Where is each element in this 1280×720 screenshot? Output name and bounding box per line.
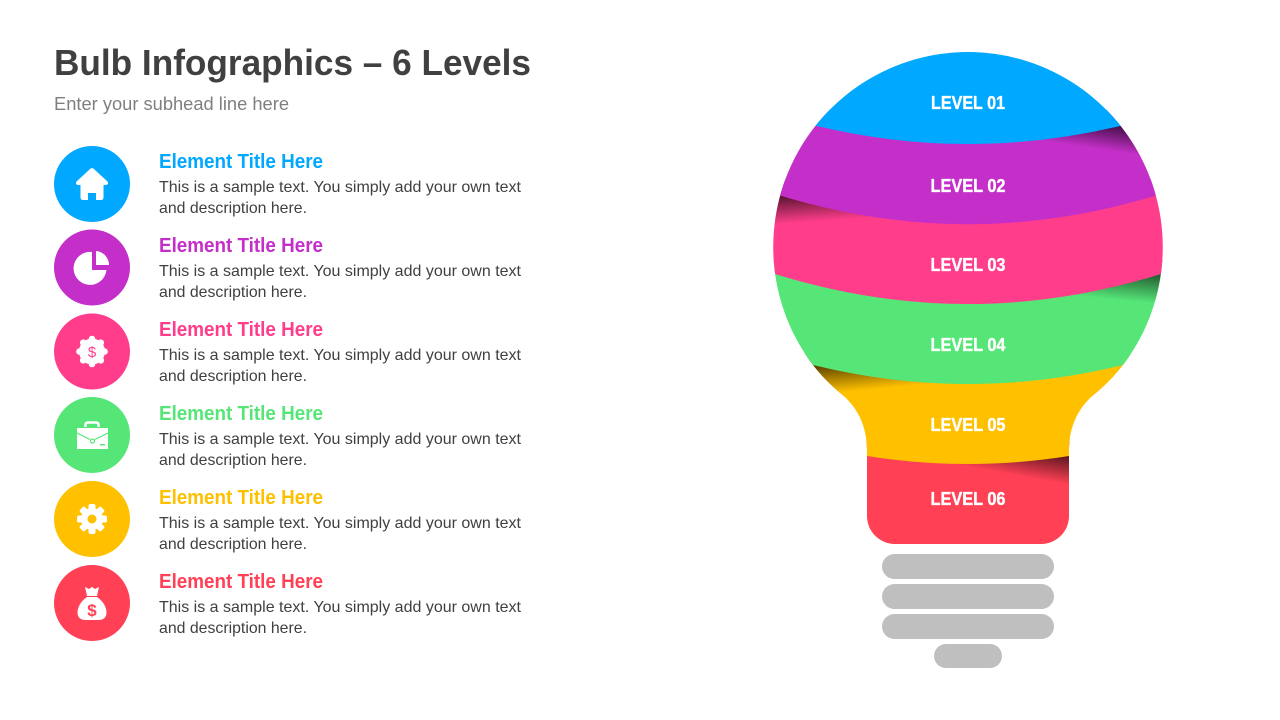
level 05 band (805, 350, 1130, 464)
level 05 band: LEVEL 05 (930, 415, 1006, 435)
level 06 band (866, 440, 1070, 544)
icon: gear (54, 481, 130, 557)
item 2 title: Element Title Here (159, 235, 323, 257)
level 06 band: LEVEL 06 (930, 489, 1006, 509)
subhead: Enter your subhead line here (54, 94, 289, 114)
light bulb glass (765, 40, 1170, 550)
item 1 text: This is a sample text. You simply add your own text (159, 179, 522, 196)
item 4 text: and description here. (159, 452, 307, 469)
level 02 band (770, 110, 1170, 224)
item 3 text: and description here. (159, 368, 307, 385)
item 2: pie chart (54, 230, 522, 306)
item 4 title: Element Title Here (159, 403, 323, 425)
item 1: home (54, 146, 522, 222)
level 02 band: LEVEL 02 (930, 176, 1006, 196)
item 1 text: and description here. (159, 200, 307, 217)
item 1 title: Element Title Here (159, 151, 323, 173)
item 6 text: This is a sample text. You simply add your own text (159, 599, 522, 616)
icon: dollar gear (54, 314, 130, 390)
icon: dollar gear: $ (88, 344, 97, 361)
item 3 title: Element Title Here (159, 319, 323, 341)
icon: money bag: $ (87, 601, 97, 620)
item 4: briefcase (54, 397, 522, 473)
item 5: gear (54, 481, 522, 557)
icon: money bag (54, 565, 130, 641)
icon: briefcase (54, 397, 130, 473)
icon: home (54, 146, 130, 222)
item 3: dollar gear (54, 314, 522, 390)
item 4 text: This is a sample text. You simply add your own text (159, 431, 522, 448)
item 5 title: Element Title Here (159, 487, 323, 509)
item 2 text: and description here. (159, 284, 307, 301)
icon: pie chart (54, 230, 130, 306)
level 01 band (815, 52, 1121, 144)
item 5 text: and description here. (159, 536, 307, 553)
level 01 band: LEVEL 01 (931, 93, 1005, 113)
bulb screw base (882, 554, 1054, 668)
item 2 text: This is a sample text. You simply add your own text (159, 263, 522, 280)
title: Bulb Infographics – 6 Levels (54, 42, 531, 83)
item 6: money bag (54, 565, 522, 641)
level 04 band (770, 260, 1170, 384)
level 03 band: LEVEL 03 (930, 255, 1006, 275)
level 03 band (765, 180, 1170, 304)
item 5 text: This is a sample text. You simply add your own text (159, 515, 522, 532)
item 6 title: Element Title Here (159, 571, 323, 593)
item 6 text: and description here. (159, 620, 307, 637)
item 3 text: This is a sample text. You simply add your own text (159, 347, 522, 364)
level 04 band: LEVEL 04 (930, 335, 1006, 355)
